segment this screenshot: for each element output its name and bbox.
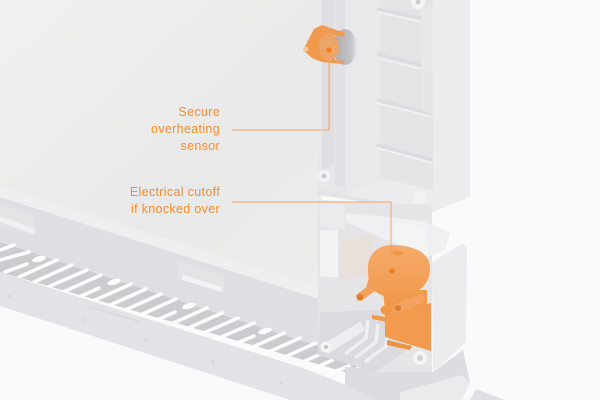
label: electrical cutoff: Electrical cutoff <box>130 185 220 199</box>
connector <box>346 213 450 260</box>
panel: heater wall <box>0 0 322 290</box>
marker: sensor <box>326 47 332 53</box>
leader line: sensor <box>232 50 329 130</box>
label: secure overheating sensor: Secure <box>178 105 220 119</box>
icon: orange tilt switch <box>357 245 431 351</box>
outer rail <box>318 0 347 195</box>
clip: left <box>0 219 33 231</box>
lower rail <box>0 272 377 400</box>
foot base <box>345 350 505 400</box>
label: secure overheating sensor: overheating <box>151 122 220 136</box>
label: electrical cutoff <box>130 185 220 216</box>
icon: overheating sensor mount ring <box>333 29 357 65</box>
panel: base tray <box>0 197 322 354</box>
label: secure overheating sensor: sensor <box>180 139 220 153</box>
lower housing <box>318 200 450 372</box>
leader line: cutoff <box>232 202 391 270</box>
grille vents <box>0 242 360 374</box>
inner cavity ribs <box>377 9 433 163</box>
switch box <box>385 303 431 351</box>
ledge <box>345 178 433 212</box>
panel: lower edge strip <box>0 186 322 300</box>
marker: cutoff <box>389 268 395 274</box>
label: secure overheating sensor <box>151 105 220 153</box>
tube nozzles <box>360 288 420 310</box>
icon: orange overheating sensor <box>303 25 345 64</box>
fins cavity <box>318 310 407 372</box>
neck <box>383 290 427 313</box>
right face <box>433 0 470 212</box>
screw post <box>318 170 330 182</box>
right lower face <box>432 243 467 372</box>
clip: centre <box>184 278 220 289</box>
switch dome <box>368 245 430 297</box>
upper housing <box>318 0 470 212</box>
flange panel <box>347 0 380 195</box>
label: electrical cutoff: if knocked over <box>131 202 220 216</box>
